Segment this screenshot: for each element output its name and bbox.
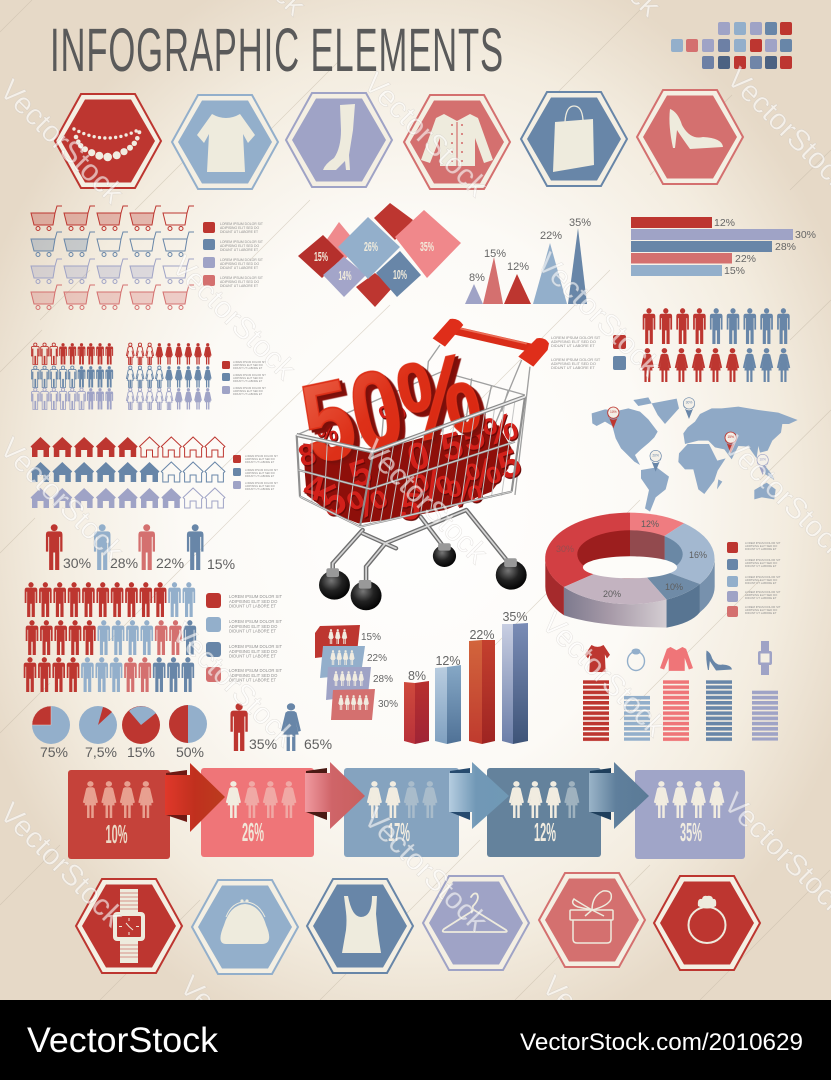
ribbon cards chart: 22% [367, 653, 387, 664]
legend: donut chart: LOREM IPSUM DOLOR SIT [745, 590, 781, 594]
icon: ring hexagon [654, 876, 760, 970]
legend: donut chart: LOREM IPSUM DOLOR SIT [745, 575, 781, 579]
legend: men pictogram block: ADIPISING ELIT SED DO [229, 599, 278, 604]
ribbon cards chart: 28% [373, 674, 393, 685]
legend: donut chart: DIDUNT UT LABORE ET [745, 611, 777, 615]
watermarks: VectorStock [535, 607, 672, 744]
legend: central people: LOREM IPSUM DOLOR SIT [551, 357, 601, 362]
legend: people outline chart: DIDUNT UT LABORE ET [233, 392, 263, 396]
houses chart [30, 437, 225, 508]
legend: donut chart: DIDUNT UT LABORE ET [745, 547, 777, 551]
ribbon cards chart: 30% [378, 699, 398, 710]
men pictogram block [24, 582, 196, 692]
four men percentages: 22% [156, 555, 184, 571]
legend: people outline chart: LOREM IPSUM DOLOR SIT [233, 360, 266, 364]
arrow: red [165, 763, 225, 832]
arrow flow: 35% box: 35% [680, 817, 702, 847]
legend: donut chart: ADIPISING ELIT SED DO [745, 561, 778, 565]
heap of red percent signs: %5 [460, 441, 527, 500]
legend: people outline chart: LOREM IPSUM DOLOR SIT [233, 386, 266, 390]
legend: people outline chart: ADIPISING ELIT SED DO [233, 389, 263, 393]
watermarks: VectorStock [357, 802, 494, 939]
men and women pictogram [641, 308, 790, 382]
watermarks: VectorStock [357, 434, 494, 571]
heap of red percent signs: 4 [300, 467, 329, 510]
horizontal bar chart [631, 217, 816, 277]
donut chart: 16% [689, 550, 707, 560]
arrow flow: 12% box [487, 768, 601, 857]
legend: central people [551, 335, 626, 370]
legend: people outline chart: ADIPISING ELIT SED DO [233, 363, 263, 367]
heap of red percent signs: 5% [458, 404, 522, 460]
3D column chart: 8% [408, 669, 426, 683]
icon: t-shirt hexagon [172, 95, 278, 189]
heap of red percent signs: 5 [436, 423, 468, 470]
legend: people outline chart: DIDUNT UT LABORE ET [233, 366, 263, 370]
world map [592, 397, 798, 512]
icon: purse hexagon [192, 880, 298, 974]
legend: donut chart [727, 541, 781, 617]
legend: cart chart: DIDUNT UT LABORE ET [220, 284, 258, 288]
legend: men pictogram block: ADIPISING ELIT SED DO [229, 649, 278, 654]
cart wheels [319, 543, 527, 610]
watermarks: VectorStock [165, 250, 302, 387]
pie charts: 7,5% [85, 744, 117, 760]
icon: boot hexagon [286, 93, 392, 187]
colour swatches [671, 22, 792, 69]
legend: cart chart: LOREM IPSUM DOLOR SIT [220, 240, 263, 244]
legend: cart chart: DIDUNT UT LABORE ET [220, 266, 258, 270]
arrow: pink [305, 762, 365, 829]
heap of red percent signs: % [406, 455, 459, 513]
legend: donut chart: DIDUNT UT LABORE ET [745, 581, 777, 585]
diamond chart: 15% [314, 249, 328, 264]
legend: cart chart: DIDUNT UT LABORE ET [220, 248, 258, 252]
legend: houses chart: ADIPISING ELIT SED DO [245, 457, 275, 461]
triangle chart: 15% [484, 248, 506, 260]
watermarks: VectorStock [357, 67, 494, 204]
legend: cart chart: DIDUNT UT LABORE ET [220, 230, 258, 234]
men vs women percentages: 35% [249, 736, 277, 752]
central illustration: shopping cart with 50% [291, 319, 549, 610]
legend: houses chart: LOREM IPSUM DOLOR SIT [245, 468, 278, 472]
footer bar [0, 1000, 831, 1080]
donut chart: 10% [665, 582, 683, 592]
front wires [297, 397, 525, 527]
icon: hanger hexagon [423, 876, 529, 970]
icon: tank top hexagon [307, 879, 413, 973]
legend: men pictogram block: LOREM IPSUM DOLOR SIT [229, 594, 282, 599]
ribbon cards chart: 15% [361, 632, 381, 643]
men vs women percentages: 65% [304, 736, 332, 752]
heap of red percent signs: 5 [344, 450, 377, 496]
four men percentages: 28% [110, 555, 138, 571]
back wires and handle posts [297, 345, 530, 495]
footer bar: VectorStock [27, 1021, 219, 1060]
people outline chart: men and women [31, 343, 212, 410]
donut chart: 12% [641, 519, 659, 529]
arrow flow: 10% box: 10% [106, 819, 128, 849]
triangle chart: 22% [540, 230, 562, 242]
pie charts: 15% [127, 744, 155, 760]
legend: donut chart: LOREM IPSUM DOLOR SIT [745, 541, 781, 545]
legend: men pictogram block: DIDUNT UT LABORE ET [229, 604, 277, 608]
legend: men pictogram block: LOREM IPSUM DOLOR SIT [229, 644, 282, 649]
arrow flow: 35% box [635, 770, 745, 859]
cart frame [333, 510, 512, 590]
diamond chart: 14% [338, 268, 352, 283]
map pins: 30% [686, 401, 692, 405]
big 50% text: 50% [291, 328, 490, 487]
icon: watch hexagon [76, 879, 182, 973]
legend: central people: DIDUNT UT LABORE ET [551, 343, 595, 348]
legend: houses chart: ADIPISING ELIT SED DO [245, 484, 275, 488]
legend: cart chart [203, 222, 263, 288]
legend: cart chart: LOREM IPSUM DOLOR SIT [220, 276, 263, 280]
triangle chart: 12% [507, 261, 529, 273]
heap of red percent signs: % [443, 467, 487, 517]
legend: men pictogram block: ADIPISING ELIT SED DO [229, 624, 278, 629]
legend: central people: DIDUNT UT LABORE ET [551, 365, 595, 370]
handle [433, 319, 549, 367]
legend: men pictogram block: LOREM IPSUM DOLOR SIT [229, 668, 282, 673]
diamond chart: 35% [420, 239, 434, 254]
legend: donut chart: ADIPISING ELIT SED DO [745, 544, 778, 548]
horizontal bar chart: 12% [714, 217, 735, 229]
shopping cart pictogram chart [31, 206, 194, 310]
legend: houses chart: LOREM IPSUM DOLOR SIT [245, 454, 278, 458]
legend: houses chart: DIDUNT UT LABORE ET [245, 474, 275, 478]
legend: men pictogram block: DIDUNT UT LABORE ET [229, 654, 277, 658]
diamond chart: 26% [364, 239, 378, 254]
legend: donut chart: ADIPISING ELIT SED DO [745, 578, 778, 582]
map pins: 15% [727, 435, 734, 439]
pie charts: 75% [40, 744, 68, 760]
legend: central people: ADIPISING ELIT SED DO [551, 339, 596, 344]
heap of red percent signs: 8 [295, 437, 320, 473]
arrow flow: 26% box: 26% [242, 817, 264, 847]
arrow: steel [589, 762, 649, 829]
horizontal bar chart: 22% [735, 253, 756, 265]
icon: jacket hexagon [404, 95, 510, 189]
icon: necklace hexagon [55, 94, 161, 188]
watermarks: VectorStock [165, 617, 302, 754]
legend: cart chart: ADIPISING ELIT SED DO [220, 262, 259, 266]
heap of red percent signs: 5 [398, 484, 423, 529]
four men percentages: 30% [63, 555, 91, 571]
legend: houses chart: LOREM IPSUM DOLOR SIT [245, 481, 278, 485]
heap of red percent signs: % [374, 393, 411, 433]
3D column chart: 22% [469, 628, 495, 642]
3D column chart [404, 610, 528, 744]
legend: central people: ADIPISING ELIT SED DO [551, 361, 596, 366]
triangle chart [465, 217, 591, 304]
legend: donut chart: LOREM IPSUM DOLOR SIT [745, 605, 781, 609]
map pins [608, 398, 768, 475]
legend: cart chart: LOREM IPSUM DOLOR SIT [220, 222, 263, 226]
legend: people outline chart [222, 360, 266, 396]
pie charts [32, 705, 207, 760]
triangle chart: 8% [469, 272, 485, 284]
donut chart: 30% [556, 544, 574, 554]
watermarks: VectorStock [530, 247, 667, 384]
footer bar: VectorStock.com/2010629 [520, 1029, 803, 1056]
legend: men pictogram block [206, 593, 282, 682]
legend: donut chart: ADIPISING ELIT SED DO [745, 608, 778, 612]
donut chart: 20% [603, 589, 621, 599]
legend: donut chart: ADIPISING ELIT SED DO [745, 593, 778, 597]
legend: cart chart: ADIPISING ELIT SED DO [220, 226, 259, 230]
arrow flow: 26% box [201, 768, 314, 857]
horizontal bar chart: 28% [775, 241, 796, 253]
four men percentages: 15% [207, 556, 235, 572]
heap of red percent signs: 0 [403, 433, 435, 480]
striped product bars [583, 641, 778, 741]
heap of red percent signs [295, 393, 527, 529]
arrow flow: 10% box [68, 770, 170, 859]
donut chart [545, 513, 715, 628]
arrow flow: 17% box [344, 768, 459, 857]
legend: cart chart: ADIPISING ELIT SED DO [220, 244, 259, 248]
icon: high heel hexagon [637, 90, 743, 184]
map pins: 10% [610, 410, 617, 414]
cart basket and contents [291, 319, 549, 529]
legend: houses chart: ADIPISING ELIT SED DO [245, 471, 275, 475]
icon: gift hexagon [539, 873, 645, 967]
arrow flow: 17% box: 17% [388, 817, 410, 847]
legend: houses chart: DIDUNT UT LABORE ET [245, 460, 275, 464]
icon: shopping bag hexagon [521, 92, 627, 186]
legend: men pictogram block: ADIPISING ELIT SED DO [229, 673, 278, 678]
map pins: 10% [759, 457, 766, 461]
legend: people outline chart: LOREM IPSUM DOLOR SIT [233, 373, 266, 377]
horizontal bar chart: 15% [724, 265, 745, 277]
legend: donut chart: DIDUNT UT LABORE ET [745, 564, 777, 568]
legend: people outline chart: ADIPISING ELIT SED DO [233, 376, 263, 380]
men vs women percentages [230, 703, 332, 752]
title: INFOGRAPHIC ELEMENTS [50, 16, 504, 84]
legend: donut chart: DIDUNT UT LABORE ET [745, 596, 777, 600]
legend: cart chart: ADIPISING ELIT SED DO [220, 280, 259, 284]
arrow flow: 12% box: 12% [534, 817, 556, 847]
3D column chart: 12% [435, 654, 461, 668]
legend: houses chart: DIDUNT UT LABORE ET [245, 487, 275, 491]
3D column chart: 35% [502, 610, 528, 624]
map pins: 20% [652, 453, 659, 457]
diamond chart: 10% [393, 267, 407, 282]
diamond chart [298, 203, 461, 307]
heap of red percent signs: % [315, 419, 340, 448]
heap of red percent signs: 5 [312, 474, 353, 526]
triangle chart: 35% [569, 217, 591, 229]
legend: men pictogram block: DIDUNT UT LABORE ET [229, 678, 277, 682]
horizontal bar chart: 30% [795, 229, 816, 241]
four men percentages [46, 524, 235, 572]
heap of red percent signs: % [339, 470, 395, 529]
arrow: light blue [449, 762, 509, 829]
legend: people outline chart: DIDUNT UT LABORE ET [233, 379, 263, 383]
pie charts: 50% [176, 744, 204, 760]
legend: men pictogram block: LOREM IPSUM DOLOR SIT [229, 619, 282, 624]
legend: houses chart [233, 454, 278, 491]
ribbon cards chart [315, 625, 398, 720]
legend: central people: LOREM IPSUM DOLOR SIT [551, 335, 601, 340]
legend: men pictogram block: DIDUNT UT LABORE ET [229, 628, 277, 634]
legend: donut chart: LOREM IPSUM DOLOR SIT [745, 558, 781, 562]
legend: cart chart: LOREM IPSUM DOLOR SIT [220, 258, 263, 262]
